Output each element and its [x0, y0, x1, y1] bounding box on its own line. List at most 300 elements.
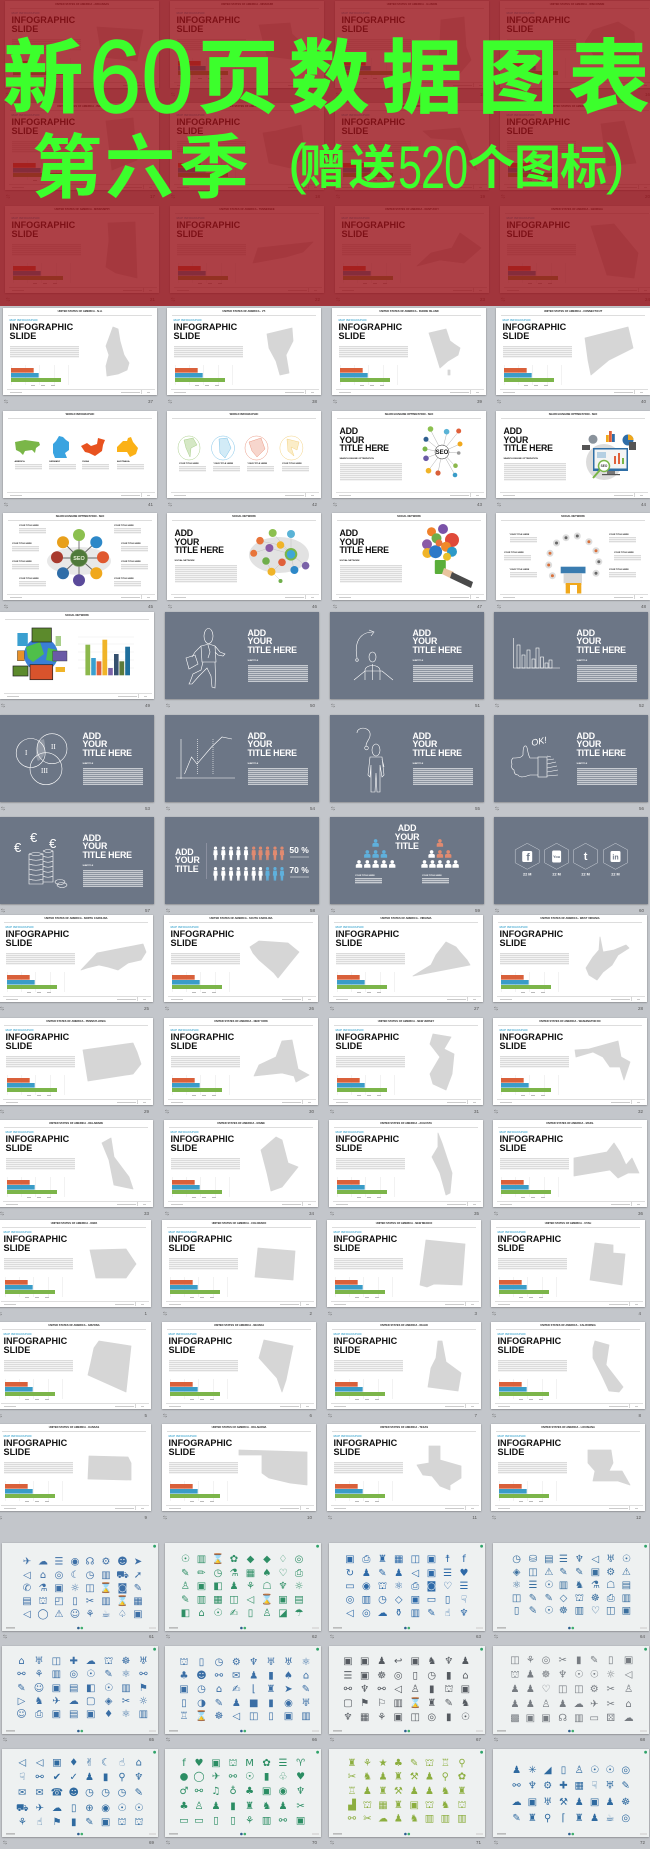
- map: Oklahoma: [162, 1424, 316, 1511]
- icon grid: ♣♙♟▮♜♞♟✂: [180, 1801, 305, 1812]
- slide 61: icon grid: [2, 1543, 158, 1631]
- slide 28: West Virginia: UNITED STATES OF AMERICA - WEST VIRGINIA: [540, 917, 600, 920]
- icon grid: ●◯✈⚯☉▮♧♥: [180, 1772, 305, 1782]
- slide 45: SEO hub and spoke: YOUR TITLE HERE: [121, 560, 141, 562]
- text: 24: [645, 297, 650, 302]
- heading: TITLE HERE: [576, 645, 626, 655]
- text: 70: [312, 1840, 317, 1845]
- heading: TITLE HERE: [504, 443, 553, 453]
- people pyramids: [330, 817, 484, 904]
- social hexagons: t: [584, 851, 588, 863]
- slide 48: social people ring: SOCIAL NETWORK: [561, 515, 585, 518]
- slide 59: people pyramids: YOUR TITLE HERE: [355, 874, 375, 876]
- slide 3: New Mexico: SLIDE: [334, 1243, 360, 1253]
- icon: thumbs up: [494, 715, 648, 802]
- country maps: [15, 436, 138, 458]
- text: 3: [474, 1311, 477, 1316]
- slide 53: venn diagram sketch: [0, 715, 154, 802]
- slide 13: Arkansas (tinted): SLIDE: [12, 24, 38, 34]
- icon: coins: €: [30, 830, 38, 845]
- text: 27: [474, 1006, 479, 1011]
- map: West Virginia: [493, 915, 647, 1002]
- icon grid: ◧⌂☉✍▯♙◪☂: [181, 1608, 304, 1619]
- bar chart: [500, 1075, 558, 1097]
- slide 8: California: SLIDE: [498, 1345, 524, 1355]
- slide 14: Missouri (tinted): [170, 1, 324, 88]
- bar chart: [498, 1481, 556, 1503]
- heading: TITLE HERE: [340, 545, 389, 555]
- icon: man with question mark: [330, 715, 484, 802]
- heading: [82, 834, 132, 860]
- slide 52: sketched bar chart: SUBTITLE: [576, 660, 587, 662]
- icon grid: ♖⌛☸◁◫▯▣▥: [180, 1709, 311, 1722]
- bar chart: [508, 58, 566, 80]
- bar chart: [342, 58, 400, 80]
- icon: coins: €: [49, 836, 57, 851]
- icon grid: [2, 1543, 158, 1631]
- text: 29: [144, 1109, 149, 1114]
- hand holding social icons: [422, 524, 473, 588]
- text: 45: [148, 604, 153, 609]
- icon grid: ⚛☰☉▥♞⚗☖▤: [512, 1580, 631, 1591]
- slide 16: Wisconsin (tinted): SLIDE: [506, 24, 533, 34]
- icon grid: ◎▥◷◇▣▭▯☟: [346, 1594, 467, 1606]
- icon grid: ◁⌂◎☾◷▥⛟➚: [23, 1570, 142, 1581]
- text: 5: [144, 1413, 147, 1418]
- bar chart: [178, 160, 236, 182]
- text: 19: [480, 194, 485, 199]
- slide 13: Arkansas (tinted): UNITED STATES OF AMERICA - ARKANSAS: [55, 3, 109, 6]
- heading: [82, 731, 132, 758]
- slide 41: world infographic, country silhouettes: AUSTRALIA: [117, 461, 130, 463]
- icon grid: ☟⚯✔✓♟▮⚲♆: [19, 1772, 143, 1783]
- icon grid: ✎☺▣▤◧☉▥⚑: [17, 1683, 148, 1694]
- text: 33: [144, 1211, 149, 1216]
- slide 19: Florida (tinted): SLIDE: [342, 126, 368, 136]
- icon grid: ⛫▯◷⚙♆♅♅⚛: [179, 1657, 310, 1668]
- heading: TITLE HERE: [82, 748, 132, 758]
- icon grid: ▣◷⌂✍⌊♜➤✎: [179, 1684, 310, 1695]
- slide 18: Ohio (tinted): INFOGRAPHIC: [176, 117, 240, 127]
- icon grid: ▤⛫◰▯✂▥⌛▦: [22, 1594, 143, 1607]
- slide 5: Arizona: MAP INFOGRAPHIC: [4, 1332, 32, 1336]
- slide 35: Augusta: INFOGRAPHIC: [336, 1134, 399, 1144]
- heading: [340, 426, 389, 453]
- slide 1: Iowa: [0, 1220, 151, 1307]
- slide 2: Colorado: INFOGRAPHIC: [168, 1234, 232, 1244]
- slide 60: social follower hexagons: [494, 817, 648, 904]
- text: 23: [480, 297, 485, 302]
- icon grid: [493, 1749, 649, 1837]
- social hexagons: in: [612, 854, 619, 862]
- icon: coins: [0, 817, 154, 904]
- bar chart: [336, 1075, 394, 1097]
- icon grid: ◈◫⚠✎✎▣⚙⚠: [513, 1567, 631, 1578]
- slide 18: Ohio (tinted): [170, 103, 324, 190]
- icon grid: ▯◑✎♟■▮◉♅: [181, 1698, 310, 1709]
- text: 16: [645, 92, 650, 97]
- slide 6: Nevada: MAP INFOGRAPHIC: [168, 1332, 197, 1336]
- slide 15: Illinois (tinted): INFOGRAPHIC: [342, 15, 405, 25]
- text: 32: [638, 1109, 643, 1114]
- slide 68: icon grid: [493, 1646, 649, 1734]
- bar chart: [508, 160, 566, 182]
- slide 18: Ohio (tinted): SLIDE: [176, 126, 203, 136]
- icon grid: [165, 1749, 321, 1837]
- title: (: [288, 132, 307, 195]
- icon grid: ⚘☝⚑▮✎▣⛫⛫: [18, 1817, 143, 1828]
- heading: YOUR: [82, 841, 107, 851]
- bar chart: [342, 263, 400, 285]
- icon grid: [493, 1543, 649, 1631]
- heading: [330, 824, 484, 850]
- slide 29: Pennsylvania: INFOGRAPHIC: [6, 1032, 69, 1042]
- text: 68: [640, 1737, 645, 1742]
- icon grid: ◷⛁▤☰♆◁♅☉: [512, 1554, 631, 1565]
- slide 36: Massachusetts: SLIDE: [500, 1143, 526, 1153]
- text: 37: [148, 399, 153, 404]
- slide 7: Idaho: MAP INFOGRAPHIC: [334, 1332, 362, 1336]
- SEO diagram: [422, 426, 462, 478]
- heading: ADD: [174, 528, 193, 538]
- slide 42: world infographic, sketched globes: YOUR TITLE HERE: [247, 463, 267, 465]
- icon grid: ◁◯⚠☺⚘☕♤▣: [23, 1609, 143, 1620]
- heading: ADD: [248, 731, 266, 741]
- venn diagram: III: [41, 767, 49, 775]
- heading: TITLE HERE: [248, 748, 297, 758]
- slide 27: Virginia: UNITED STATES OF AMERICA - VIRGINIA: [380, 917, 432, 920]
- text: 47: [477, 604, 482, 609]
- icon grid: ☰▣☸◎▯◷▮⌂: [344, 1670, 469, 1682]
- bar chart: [6, 972, 64, 994]
- heading: ADD: [340, 528, 358, 538]
- text: 64: [640, 1634, 645, 1639]
- venn diagram: II: [51, 743, 56, 751]
- slide 45: SEO hub and spoke: SEARCH ENGINE OPTIMIZATION - SEO: [56, 515, 104, 518]
- icon grid: ▭◉⛫⚛⎙◙♡☰: [345, 1581, 469, 1592]
- text: 65: [149, 1737, 154, 1742]
- title: 新: [3, 14, 83, 130]
- icon grid: ◁◁▣♦✌☾☝⌂: [18, 1758, 142, 1768]
- map: New Mexico: [327, 1220, 481, 1307]
- map: Virginia: [329, 915, 483, 1002]
- text: 38: [312, 399, 317, 404]
- slide 16: Wisconsin (tinted): INFOGRAPHIC: [506, 15, 570, 25]
- social hexagons: [494, 817, 648, 904]
- slide 34: Maine: SLIDE: [170, 1143, 197, 1153]
- slide 45: SEO hub and spoke: [3, 513, 157, 600]
- text: 50: [310, 703, 315, 708]
- screens around globe: [12, 628, 134, 680]
- map: Pennsylvania: [0, 1018, 153, 1105]
- slide 34: Maine: MAP INFOGRAPHIC: [170, 1130, 199, 1134]
- slide 12: Louisiana: INFOGRAPHIC: [498, 1438, 561, 1448]
- map: Kentucky: [335, 206, 489, 293]
- slide 34: Maine: UNITED STATES OF AMERICA - MAINE: [217, 1122, 265, 1125]
- slide 24: Georgia (tinted): UNITED STATES OF AMERICA - GEORGIA: [551, 208, 603, 211]
- heading: [175, 848, 200, 874]
- text: 42: [312, 502, 317, 507]
- bar chart: [340, 365, 398, 387]
- slide 12: Louisiana: [491, 1424, 645, 1511]
- slide 25: North Carolina: [0, 915, 153, 1002]
- title: 赠送: [299, 129, 396, 198]
- icon grid: ▣⎙♜▦◫▣☨f: [345, 1554, 466, 1565]
- slide 27: Virginia: MAP INFOGRAPHIC: [336, 925, 364, 929]
- slide 17: Indiana (tinted): [5, 103, 159, 190]
- slide 36: Massachusetts: INFOGRAPHIC: [500, 1134, 563, 1144]
- slide 5: Arizona: [0, 1322, 151, 1409]
- heading: ADD: [576, 731, 595, 741]
- slide 10: Oklahoma: SLIDE: [168, 1447, 195, 1457]
- slide 24: Georgia (tinted): MAP INFOGRAPHIC: [506, 216, 535, 220]
- icon grid: f♥▣⛫M✿☰♈: [182, 1758, 305, 1769]
- slide 44: SEO monitor illustration: SEARCH ENGINE OPTIMIZATION - SEO: [549, 413, 597, 416]
- title: [3, 14, 649, 213]
- text: 35: [474, 1211, 479, 1216]
- slide 33: Delaware: INFOGRAPHIC: [6, 1134, 69, 1144]
- heading: YOUR: [175, 855, 200, 865]
- social hexagons: 22 M: [581, 872, 590, 876]
- slide 48: social people ring: YOUR TITLE HERE: [510, 569, 529, 571]
- slide 26: South Carolina: MAP INFOGRAPHIC: [170, 925, 199, 929]
- slide 57: euro coins sketch: SUBTITLE: [82, 864, 93, 866]
- heading: ADD: [175, 847, 193, 857]
- slide 48: social people ring: YOUR TITLE HERE: [614, 552, 634, 554]
- slide 27: Virginia: INFOGRAPHIC: [336, 929, 399, 939]
- map: Georgia: [500, 206, 650, 293]
- slide 63: icon grid: [329, 1543, 485, 1631]
- slide 11: Texas: INFOGRAPHIC: [334, 1438, 397, 1448]
- icon grid: ◫✎✎◇⛫☸⎙▥: [512, 1593, 631, 1604]
- icon grid: ☉▥⌛✿◆◆♢◎: [181, 1552, 303, 1565]
- slide 29: Pennsylvania: MAP INFOGRAPHIC: [6, 1028, 34, 1032]
- slide 8: California: [491, 1322, 645, 1409]
- slide 56: thumbs up sketch: SUBTITLE: [576, 762, 587, 764]
- icon grid: ◫⚘◎✂▮✎▯▣: [510, 1655, 633, 1666]
- text: 60: [639, 908, 644, 913]
- map: Delaware: [0, 1120, 153, 1207]
- heading: ADD: [412, 628, 431, 638]
- slide 1: Iowa: MAP INFOGRAPHIC: [4, 1230, 32, 1234]
- slide 31: New Jersey: UNITED STATES OF AMERICA - NEW JERSEY: [378, 1020, 434, 1023]
- heading: [412, 732, 462, 758]
- slide 20: Alabama (tinted): SLIDE: [506, 126, 533, 136]
- icon grid: ✉✉☎☻◷◷◷✎: [18, 1786, 143, 1798]
- heading: YOUR: [395, 832, 419, 842]
- map: South Carolina: [164, 915, 318, 1002]
- icon grid: ▢⚑⚐▥⌛♜✎♞: [343, 1696, 470, 1709]
- icon grid: ▷♞✈☁▢◈✂☼: [18, 1696, 148, 1707]
- heading: [412, 628, 462, 655]
- heading: [174, 528, 224, 555]
- slide 22: Tennessee (tinted): UNITED STATES OF AMERICA - TENNESSEE: [219, 208, 275, 211]
- slide 52: sketched bar chart: [494, 612, 648, 699]
- slide 22: Tennessee (tinted): INFOGRAPHIC: [176, 220, 240, 230]
- SEO hub diagram: SEO: [73, 556, 86, 562]
- heading: YOUR: [412, 739, 437, 749]
- slide 23: Kentucky (tinted): MAP INFOGRAPHIC: [342, 216, 370, 220]
- slide 20: Alabama (tinted): MAP INFOGRAPHIC: [506, 113, 535, 117]
- icon grid: ▣▣♟↩▣♞♆♟: [343, 1656, 470, 1667]
- map: Alabama: [500, 103, 650, 190]
- text: 36: [638, 1211, 643, 1216]
- slide 37: New Hampshire: UNITED STATES OF AMERICA - N.H.: [58, 310, 102, 313]
- slide 10: Oklahoma: [162, 1424, 316, 1511]
- text: 7: [474, 1413, 477, 1418]
- icon grid: ♣☻⚯✉♟▮♠⌂: [180, 1670, 309, 1682]
- red banner overlay: [0, 0, 650, 306]
- icon grid: ⛟✈☁▯⊕◉☉☉: [16, 1803, 143, 1814]
- text: 44: [641, 502, 646, 507]
- icon grid: ♖♟♜⚒♟♟♞♜: [348, 1786, 466, 1797]
- slide 14: Missouri (tinted): UNITED STATES OF AMERICA - MISSOURI: [221, 3, 273, 6]
- slide 16: Wisconsin (tinted): [500, 1, 650, 88]
- slide 36: Massachusetts: [493, 1120, 647, 1207]
- heading: ADD: [340, 426, 358, 436]
- social hexagons: f: [526, 852, 530, 864]
- icon grid: ▩▣▣☊▥▭⚄☁: [510, 1713, 634, 1724]
- icon grid: ▭▭▯▯⚘▥⚯▣: [179, 1816, 305, 1826]
- slide 47: social icon tree with hand: SOCIAL NETWORK: [397, 515, 421, 518]
- slide 7: Idaho: [327, 1322, 481, 1409]
- icon: walking man: [186, 628, 226, 688]
- slide 32: Washington DC / Maryland: UNITED STATES OF AMERICA - WASHINGTON DC: [539, 1020, 601, 1023]
- slide 41: world infographic, country silhouettes: CHINA: [82, 461, 89, 463]
- icon grid: ☁▣♅⚒♟▣♟☸: [512, 1797, 630, 1808]
- slide 4: Utah: UNITED STATES OF AMERICA - UTAH: [545, 1222, 591, 1225]
- slide 6: Nevada: [162, 1322, 316, 1409]
- slide 29: Pennsylvania: [0, 1018, 153, 1105]
- slide 23: Kentucky (tinted): UNITED STATES OF AMERICA - KENTUCKY: [385, 208, 439, 211]
- heading: ADD: [412, 731, 431, 741]
- text: 57: [145, 908, 150, 913]
- slide 21: Mississippi (tinted): UNITED STATES OF AMERICA - MISSISSIPPI: [55, 208, 109, 211]
- heading: YOUR: [340, 435, 364, 445]
- heading: TITLE HERE: [82, 850, 132, 860]
- bar chart: [172, 972, 230, 994]
- text: 48: [641, 604, 646, 609]
- slide 12: Louisiana: MAP INFOGRAPHIC: [498, 1434, 526, 1438]
- slide 64: icon grid: [493, 1543, 649, 1631]
- text: 49: [145, 703, 150, 708]
- title: 60: [89, 18, 193, 134]
- map: Augusta: [329, 1120, 483, 1207]
- heading: YOUR: [576, 636, 601, 646]
- icon grid: ⚯⚘▥◎☉✎⚛⚯: [17, 1669, 148, 1680]
- slide 3: New Mexico: [327, 1220, 481, 1307]
- text: 63: [476, 1634, 481, 1639]
- icon grid: ♜⚘★♣✎⛫♖⚲: [348, 1758, 466, 1769]
- slide 45: SEO hub and spoke: YOUR TITLE HERE: [12, 560, 32, 562]
- slide 45: SEO hub and spoke: YOUR TITLE HERE: [12, 543, 32, 545]
- text: 30: [309, 1109, 314, 1114]
- text: 14: [315, 92, 320, 97]
- slide 9: Kansas: [0, 1424, 151, 1511]
- slide 4: Utah: MAP INFOGRAPHIC: [498, 1230, 526, 1234]
- venn diagram: I: [25, 749, 28, 757]
- slide 24: Georgia (tinted): SLIDE: [506, 229, 533, 239]
- icon grid: [2, 1646, 158, 1734]
- slide 31: New Jersey: INFOGRAPHIC: [336, 1032, 399, 1042]
- slide 32: Washington DC / Maryland: MAP INFOGRAPHIC: [500, 1028, 528, 1032]
- icon grid: ▟⛫▦♜▣⛫♞⛫: [347, 1798, 467, 1811]
- slide 48: social people ring: [496, 513, 650, 600]
- map: North Carolina: [0, 915, 153, 1002]
- slide 65: icon grid: [2, 1646, 158, 1734]
- text: 15: [480, 92, 485, 97]
- map: Kansas: [0, 1424, 151, 1511]
- map: California: [491, 1322, 645, 1409]
- icon grid: ⌂♅◫✚☁⛫☸♅: [18, 1656, 148, 1667]
- slide 15: Illinois (tinted): [335, 1, 489, 88]
- slide 35: Augusta: SLIDE: [336, 1143, 362, 1153]
- slide 45: SEO hub and spoke: YOUR TITLE HERE: [19, 525, 39, 527]
- heading: ADD: [82, 731, 101, 741]
- text: 25: [144, 1006, 149, 1011]
- map: Texas: [327, 1424, 481, 1511]
- map: Vermont: [266, 328, 294, 376]
- people ring: [545, 532, 602, 594]
- social network graph: [249, 529, 310, 583]
- slide 31: New Jersey: [329, 1018, 483, 1105]
- slide 1: Iowa: SLIDE: [4, 1243, 30, 1253]
- slide 42: world infographic, sketched globes: WORLD INFOGRAPHIC: [230, 413, 258, 416]
- map: Illinois: [335, 1, 489, 88]
- heading: YOUR: [340, 537, 364, 547]
- slide 7: Idaho: UNITED STATES OF AMERICA - IDAHO: [380, 1324, 428, 1327]
- slide 6: Nevada: UNITED STATES OF AMERICA - NEVADA: [214, 1324, 264, 1327]
- text: 31: [474, 1109, 479, 1114]
- SEO hub diagram: [47, 529, 111, 586]
- icon grid: ✎♜⚲⌈♜♟☕◎: [512, 1813, 630, 1824]
- slide 20: Alabama (tinted): UNITED STATES OF AMERICA - ALABAMA: [551, 105, 603, 108]
- heading: [504, 426, 553, 453]
- slide 37: New Hampshire: [3, 308, 157, 395]
- icon grid: ▯✎☉☸▥♡◫▣: [514, 1606, 631, 1616]
- slide 46: social network map: SOCIAL NETWORK: [232, 515, 256, 518]
- slide 15: Illinois (tinted): UNITED STATES OF AMERICA - ILLINOIS: [387, 3, 437, 6]
- icon grid: [165, 1646, 321, 1734]
- icon grid: ⚯♆⚯◁♙▮⛫▣: [344, 1684, 470, 1695]
- bar chart: [6, 1177, 64, 1199]
- slide 11: Texas: [327, 1424, 481, 1511]
- heading: [248, 628, 297, 655]
- heading: TITLE HERE: [412, 645, 462, 655]
- slide 40: Connecticut: MAP INFOGRAPHIC: [502, 318, 531, 322]
- slide 6: Nevada: INFOGRAPHIC: [168, 1336, 232, 1346]
- slide 51: arrow and person sketch: [330, 612, 484, 699]
- icon grid: ↻♟✎♟◁▣☰♥: [346, 1568, 469, 1579]
- slide 47: social icon tree with hand: [332, 513, 486, 600]
- slide 30: New York: UNITED STATES OF AMERICA - NEW YORK: [214, 1020, 268, 1023]
- slide 25: North Carolina: UNITED STATES OF AMERICA - NORTH CAROLINA: [44, 917, 108, 920]
- text: 2: [309, 1311, 312, 1316]
- slide 33: Delaware: UNITED STATES OF AMERICA - DELAWARE: [49, 1122, 103, 1125]
- icon grid: [329, 1543, 485, 1631]
- bar chart: [334, 1481, 392, 1503]
- slide 57: euro coins sketch: [0, 817, 154, 904]
- text: 66: [312, 1737, 317, 1742]
- slide 20: Alabama (tinted): [500, 103, 650, 190]
- heading: ADD: [398, 823, 416, 833]
- text: 40: [641, 399, 646, 404]
- slide 46: social network map: [167, 513, 321, 600]
- map: Arizona: [0, 1322, 151, 1409]
- slide 8: California: UNITED STATES OF AMERICA - CALIFORNIA: [540, 1324, 596, 1327]
- slide 22: Tennessee (tinted): MAP INFOGRAPHIC: [176, 216, 205, 220]
- slide 13: Arkansas (tinted): INFOGRAPHIC: [12, 15, 75, 25]
